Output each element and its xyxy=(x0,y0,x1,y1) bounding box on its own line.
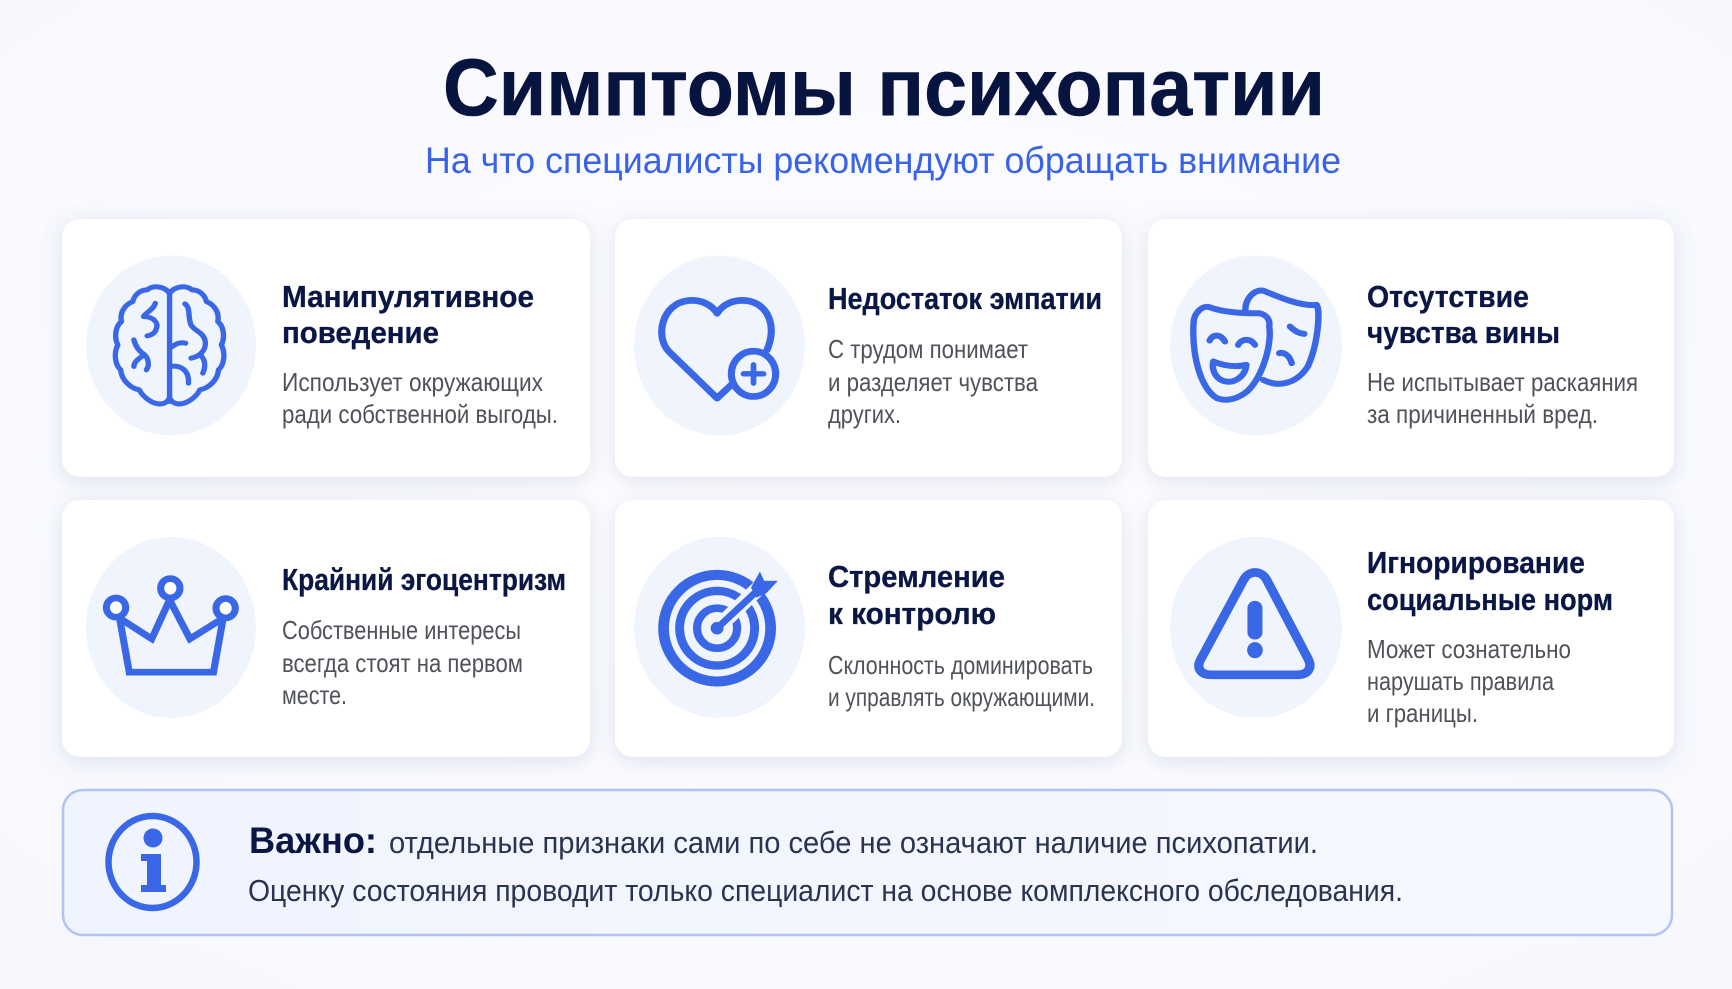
description: ради собственной выгоды. xyxy=(282,399,558,429)
description xyxy=(282,367,558,429)
panel: manipulative behaviour xyxy=(62,219,590,477)
heading: Крайний эгоцентризм xyxy=(282,562,566,597)
callout: important note xyxy=(63,790,1672,935)
description: и разделяет чувства xyxy=(828,367,1038,397)
panel: striving for control xyxy=(615,500,1122,757)
note text: Важно: xyxy=(249,820,377,861)
description: Может сознательно xyxy=(1367,634,1571,664)
description xyxy=(282,615,523,710)
description: Не испытывает раскаяния xyxy=(1367,367,1638,397)
heading: Игнорирование xyxy=(1367,545,1585,580)
heading xyxy=(282,279,534,350)
heading: к контролю xyxy=(828,596,996,631)
heading: поведение xyxy=(282,315,439,350)
heading xyxy=(1367,279,1560,350)
icon: warning triangle xyxy=(1170,537,1342,718)
description: Использует окружающих xyxy=(282,367,543,397)
heading xyxy=(1367,545,1613,617)
description: других. xyxy=(828,399,901,429)
description xyxy=(1367,367,1638,429)
title: Симптомы психопатии xyxy=(443,43,1325,133)
description: всегда стоят на первом xyxy=(282,648,523,678)
description: за причиненный вред. xyxy=(1367,399,1598,429)
icon: brain xyxy=(86,256,256,436)
icon: theatre masks xyxy=(1170,256,1342,436)
icon: crown xyxy=(86,537,256,718)
icon: info xyxy=(108,816,196,908)
description: нарушать правила xyxy=(1367,666,1554,696)
icon: target with arrow xyxy=(634,537,805,718)
note text: Оценку состояния проводит только специалист на основе комплексного обследования. xyxy=(248,873,1403,908)
heading: Стремление xyxy=(828,559,1005,594)
heading: чувства вины xyxy=(1367,315,1560,350)
heading: Манипулятивное xyxy=(282,279,534,314)
description xyxy=(1367,634,1571,728)
note text xyxy=(248,820,1403,908)
panel: extreme egocentrism xyxy=(62,500,590,757)
description: и управлять окружающими. xyxy=(828,682,1095,712)
panel: lack of empathy xyxy=(615,219,1122,477)
icon: heart with plus xyxy=(634,256,805,436)
description: Склонность доминировать xyxy=(828,650,1093,680)
heading xyxy=(828,559,1005,631)
heading: социальные норм xyxy=(1367,582,1613,617)
description: месте. xyxy=(282,680,347,710)
note text: отдельные признаки сами по себе не означают наличие психопатии. xyxy=(389,825,1318,860)
panel: absence of guilt xyxy=(1148,219,1674,477)
description: С трудом понимает xyxy=(828,334,1028,364)
description: Собственные интересы xyxy=(282,615,521,645)
description xyxy=(828,650,1095,712)
panel: ignoring social norms xyxy=(1148,500,1674,757)
description xyxy=(828,334,1038,429)
heading: Отсутствие xyxy=(1367,279,1529,314)
subtitle: На что специалисты рекомендуют обращать внимание xyxy=(425,140,1341,181)
description: и границы. xyxy=(1367,698,1478,728)
heading: Недостаток эмпатии xyxy=(828,281,1102,316)
